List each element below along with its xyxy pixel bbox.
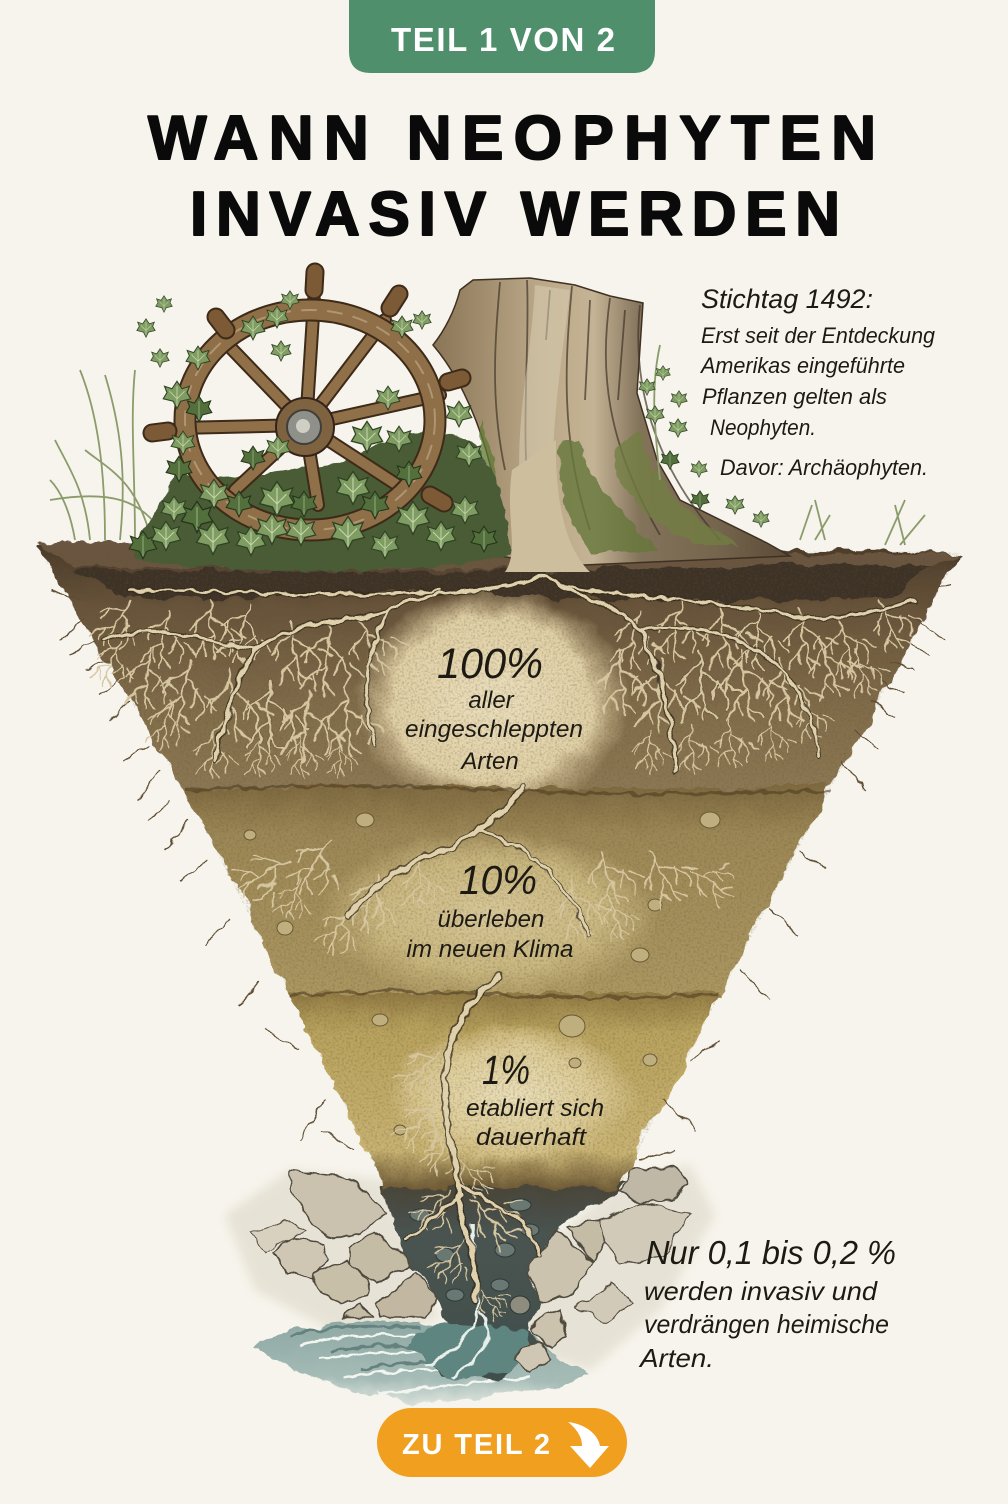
- note: Nur 0,1 bis 0,2 Prozent: werden invasiv und: [644, 1276, 879, 1306]
- rocks around the funnel: [250, 1167, 690, 1373]
- tree stump: [433, 278, 790, 572]
- label: 10 percent: überleben: [438, 906, 544, 933]
- note: Nur 0,1 bis 0,2 Prozent: Nur 0,1 bis 0,2 %: [646, 1234, 896, 1271]
- label: 1 percent: 1%: [482, 1047, 530, 1093]
- grass on the left: [50, 370, 160, 540]
- title: WANN NEOPHYTEN: [148, 104, 876, 173]
- wheel knobs: [152, 272, 462, 503]
- side hair roots: [50, 585, 950, 1160]
- roots: fine forks: [213, 599, 792, 752]
- foliage on the right: [654, 345, 925, 545]
- label: 100 percent: aller: [468, 687, 515, 714]
- label: 1 percent: etabliert sich: [466, 1095, 604, 1122]
- button: Zu Teil 2: [377, 1408, 627, 1477]
- note: Stichtag 1492: Davor: Archäophyten.: [720, 455, 928, 480]
- soil grain texture: [30, 540, 970, 1190]
- badge: Teil 1 von 2: [349, 0, 655, 73]
- roots: dark outline: [105, 575, 915, 1300]
- ground surface bands: [36, 540, 960, 600]
- wheel spokes and handles: [178, 300, 440, 505]
- note: Stichtag 1492: Neophyten.: [710, 415, 816, 440]
- label: 100 percent: [405, 640, 583, 775]
- badge: Teil 1 von 2: TEIL 1 VON 2: [391, 21, 615, 58]
- label: 10 percent: im neuen Klima: [406, 936, 574, 963]
- ivy leaves: [129, 291, 769, 559]
- label: 100 percent: eingeschleppten: [405, 716, 583, 743]
- roots: pale main strokes: [105, 575, 915, 1300]
- layer borders: [185, 786, 830, 998]
- dark deep soil funnel: [380, 1183, 630, 1380]
- soil layer 1: 100 percent: [36, 545, 960, 812]
- soil layer 2: 10 percent: [185, 788, 830, 1000]
- note: Nur 0,1 bis 0,2 Prozent: verdrängen heimische: [644, 1309, 889, 1339]
- label: 10 percent: [406, 857, 574, 963]
- label: 100 percent: Arten: [459, 748, 519, 775]
- faded rock haze: [225, 1165, 715, 1370]
- note: Stichtag 1492: [699, 284, 936, 480]
- label: 1 percent: [466, 1047, 604, 1151]
- note: Stichtag 1492: Amerikas eingeführte: [699, 353, 905, 378]
- label: 10 percent: 10%: [459, 857, 537, 903]
- label: 1 percent: dauerhaft: [476, 1124, 587, 1151]
- note: Nur 0,1 bis 0,2 Prozent: [638, 1234, 896, 1373]
- wheel hub: [276, 398, 334, 456]
- icon: arrow: [568, 1422, 609, 1468]
- ship wheel: [152, 272, 462, 530]
- wheel rim: [185, 310, 435, 530]
- pebbles in the soil: [244, 812, 720, 1135]
- root system: [86, 575, 929, 1326]
- button: Zu Teil 2: ZU TEIL 2: [402, 1429, 550, 1461]
- note: Stichtag 1492: Erst seit der Entdeckung: [701, 323, 936, 348]
- note: Nur 0,1 bis 0,2 Prozent: Arten.: [638, 1343, 714, 1373]
- title: INVASIV WERDEN: [190, 180, 840, 249]
- soil layer 3: 1 percent: [290, 993, 720, 1187]
- water pool: [255, 1322, 590, 1402]
- title: [148, 104, 876, 249]
- ivy mass on the ground: [135, 432, 510, 571]
- note: Stichtag 1492: Pflanzen gelten als: [702, 384, 887, 409]
- label: 100 percent: 100%: [437, 640, 543, 688]
- note: Stichtag 1492: Stichtag 1492:: [701, 284, 873, 314]
